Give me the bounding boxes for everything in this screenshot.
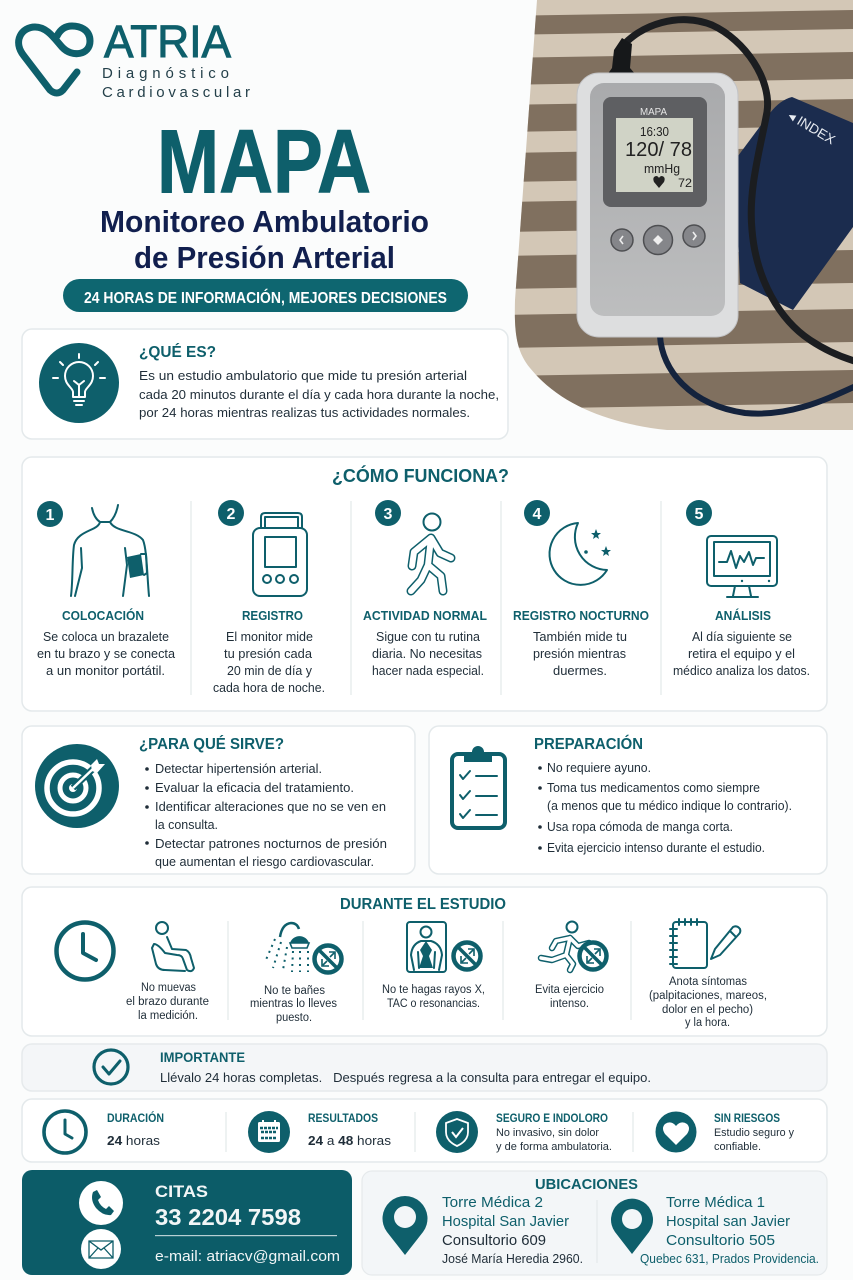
item: no te bañes: No te bañes (264, 985, 325, 997)
panel: datos clave (22, 1099, 827, 1162)
step 2: registro (213, 500, 325, 695)
step 5: análisis (673, 500, 810, 678)
step 4: registro nocturno: También mide tu (533, 630, 627, 644)
panel: citas: CITAS (155, 1182, 208, 1201)
monitor device: 72 (678, 178, 692, 190)
panel: preparación: (a menos que tu médico indique lo contrario). (547, 799, 792, 813)
location: Torre Médica 2: José María Heredia 2960. (442, 1251, 583, 1266)
panel: cómo funciona (22, 457, 827, 711)
panel: para qué sirve: Identificar alteraciones que no se ven en (155, 799, 386, 814)
panel: importante (22, 1044, 827, 1091)
step 2: registro: REGISTRO (242, 608, 303, 623)
panel: para qué sirve: Evaluar la eficacia del tratamiento. (155, 780, 354, 795)
location: Torre Médica 2: Hospital San Javier (442, 1213, 569, 1230)
fact: sin riesgos: confiable. (714, 1141, 761, 1153)
panel: preparación: No requiere ayuno. (547, 761, 651, 775)
step 1: colocación (37, 501, 175, 678)
subtitle: Monitoreo Ambulatorio (100, 204, 429, 239)
step 5: análisis: ANÁLISIS (715, 608, 771, 623)
cables (607, 20, 853, 414)
icon: light bulb (39, 343, 119, 423)
item: no te bañes: puesto. (276, 1012, 312, 1024)
panel: ubicaciones: UBICACIONES (535, 1176, 638, 1193)
logo mark: heart loop (19, 26, 90, 93)
step 2: registro: tu presión cada (224, 647, 312, 661)
item: anota síntomas: y la hora. (685, 1017, 730, 1029)
fact: seguro e indoloro: y de forma ambulatoria. (496, 1141, 612, 1153)
step 4: registro nocturno: duermes. (553, 664, 607, 678)
icon: clock (56, 922, 114, 980)
step 2: registro: El monitor mide (226, 630, 313, 644)
fact: duración: DURACIÓN (107, 1112, 164, 1125)
step 2: registro: 2 (227, 506, 236, 523)
item: evita ejercicio (535, 922, 606, 1010)
subtitle (100, 204, 429, 275)
location: Torre Médica 1: Torre Médica 1 (666, 1194, 765, 1211)
panel: ubicaciones (362, 1171, 827, 1275)
location: Torre Médica 2 (382, 1194, 583, 1266)
monitor device: 120/ 78 (625, 139, 692, 161)
panel: para qué sirve: la consulta. (155, 817, 218, 832)
title: MAPA (157, 112, 371, 212)
panel: importante: IMPORTANTE (160, 1050, 245, 1065)
panel: qué es: Es un estudio ambulatorio que mide tu presión arterial (139, 368, 467, 383)
step 3: actividad normal: ACTIVIDAD NORMAL (363, 608, 487, 623)
step 1: colocación: en tu brazo y se conecta (37, 647, 175, 661)
location: Torre Médica 1: Quebec 631, Prados Providencia. (640, 1251, 819, 1266)
step 1: colocación: COLOCACIÓN (62, 608, 144, 623)
panel: importante: Llévalo 24 horas completas. Después regresa a la consulta para entregar el equipo. (160, 1070, 651, 1085)
logo: Atria: Diagnóstico (102, 65, 229, 82)
panel: qué es: ¿QUÉ ES? (139, 342, 216, 361)
panel: preparación (429, 726, 827, 874)
location: Torre Médica 2: Torre Médica 2 (442, 1194, 543, 1211)
fact: seguro e indoloro: SEGURO E INDOLORO (496, 1113, 608, 1125)
panel: citas: e-mail: atriacv@gmail.com (155, 1248, 340, 1265)
panel: qué es: cada 20 minutos durante el día y cada hora durante la noche, (139, 387, 499, 402)
panel: preparación: PREPARACIÓN (534, 734, 643, 753)
tagline pill (63, 279, 468, 312)
icon: phone (79, 1181, 123, 1225)
panel: para qué sirve: Detectar hipertensión arterial. (155, 761, 322, 776)
monitor device: 16:30 (640, 125, 669, 139)
fact: duración: 24 horas (107, 1133, 161, 1148)
step 2: registro: cada hora de noche. (213, 681, 325, 695)
subtitle: de Presión Arterial (134, 240, 395, 275)
panel: qué es: por 24 horas mientras realizas tus actividades normales. (139, 405, 470, 420)
step 1: colocación: Se coloca un brazalete (43, 630, 169, 644)
monitor device (577, 73, 738, 337)
fact: resultados: RESULTADOS (308, 1113, 378, 1125)
icon: mail (81, 1229, 121, 1269)
item: evita ejercicio: Evita ejercicio (535, 984, 604, 996)
monitor device: mmHg (644, 161, 680, 176)
item: evita ejercicio: intenso. (550, 998, 589, 1010)
blood pressure cuff (735, 97, 853, 310)
panel: durante el estudio (22, 887, 827, 1036)
step 5: análisis: médico analiza los datos. (673, 664, 810, 678)
location: Torre Médica 2: Consultorio 609 (442, 1232, 546, 1249)
item: no muevas el brazo: la medición. (138, 1010, 198, 1022)
icon: target (35, 744, 119, 828)
fact: sin riesgos (656, 1112, 794, 1153)
step 2: registro: 20 min de día y (227, 664, 313, 678)
item: no rayos X: No te hagas rayos X, (382, 984, 485, 996)
fact: resultados: 24 a 48 horas (308, 1133, 392, 1148)
item: no te bañes: mientras lo lleves (250, 998, 337, 1010)
step 3: actividad normal: hacer nada especial. (372, 664, 484, 678)
step 4: registro nocturno: presión mientras (533, 647, 626, 661)
fact: seguro e indoloro: No invasivo, sin dolor (496, 1127, 599, 1139)
item: anota síntomas (649, 919, 767, 1029)
fact: sin riesgos: Estudio seguro y (714, 1127, 794, 1139)
location: Torre Médica 1 (611, 1194, 819, 1266)
panel: para qué sirve: Detectar patrones nocturnos de presión (155, 836, 387, 851)
fact: resultados (248, 1111, 392, 1153)
monitor device: MAPA (640, 107, 667, 118)
location: Torre Médica 1: Hospital san Javier (666, 1213, 790, 1230)
step 5: análisis: retira el equipo y el (688, 647, 795, 661)
panel: preparación: Usa ropa cómoda de manga corta. (547, 820, 733, 834)
step 4: registro nocturno: REGISTRO NOCTURNO (513, 608, 649, 623)
item: no te bañes (250, 923, 342, 1024)
photo: blood pressure monitor on striped cloth (500, 0, 853, 440)
step 3: actividad normal: Sigue con tu rutina (376, 630, 480, 644)
step 1: colocación: a un monitor portátil. (46, 664, 165, 678)
item: anota síntomas: dolor en el pecho) (662, 1004, 753, 1016)
step 3: actividad normal (363, 500, 487, 678)
panel: cómo funciona: ¿CÓMO FUNCIONA? (332, 465, 509, 486)
item: no rayos X (382, 922, 485, 1010)
fact: duración (44, 1111, 164, 1153)
step 3: actividad normal: diaria. No necesitas (372, 647, 482, 661)
tagline pill: 24 HORAS DE INFORMACIÓN, MEJORES DECISIONES (84, 289, 447, 307)
fact: sin riesgos: SIN RIESGOS (714, 1113, 780, 1125)
step 1: colocación: 1 (46, 507, 55, 524)
panel: para qué sirve: ¿PARA QUÉ SIRVE? (139, 734, 284, 753)
panel: para qué sirve (22, 726, 415, 874)
blood pressure cuff: ◂ INDEX (785, 108, 838, 147)
panel: preparación: Toma tus medicamentos como siempre (547, 781, 760, 795)
item: anota síntomas: (palpitaciones, mareos, (649, 990, 767, 1002)
step 3: actividad normal: 3 (384, 506, 393, 523)
panel: qué es (22, 329, 508, 439)
item: no muevas el brazo: No muevas (141, 982, 196, 994)
step 5: análisis: 5 (695, 506, 704, 523)
fact: seguro e indoloro (436, 1111, 612, 1153)
icon: clipboard (452, 746, 505, 828)
panel: para qué sirve: que aumentan el riesgo cardiovascular. (155, 854, 374, 869)
panel: citas (22, 1170, 352, 1275)
step 4: registro nocturno (513, 500, 649, 678)
logo: Atria (19, 16, 250, 101)
panel: citas: 33 2204 7598 (155, 1204, 301, 1230)
logo: Atria: ATRIA (104, 16, 231, 67)
location: Torre Médica 1: Consultorio 505 (666, 1232, 775, 1249)
item: no rayos X: TAC o resonancias. (387, 998, 480, 1010)
panel: durante el estudio: DURANTE EL ESTUDIO (340, 896, 506, 913)
step 4: registro nocturno: 4 (533, 506, 542, 523)
logo: Atria: Cardiovascular (102, 84, 250, 101)
item: no muevas el brazo: el brazo durante (126, 996, 209, 1008)
icon: check circle (94, 1050, 128, 1084)
item: anota síntomas: Anota síntomas (669, 976, 747, 988)
panel: preparación: Evita ejercicio intenso durante el estudio. (547, 841, 765, 855)
item: no muevas el brazo (126, 922, 209, 1022)
step 5: análisis: Al día siguiente se (692, 630, 792, 644)
